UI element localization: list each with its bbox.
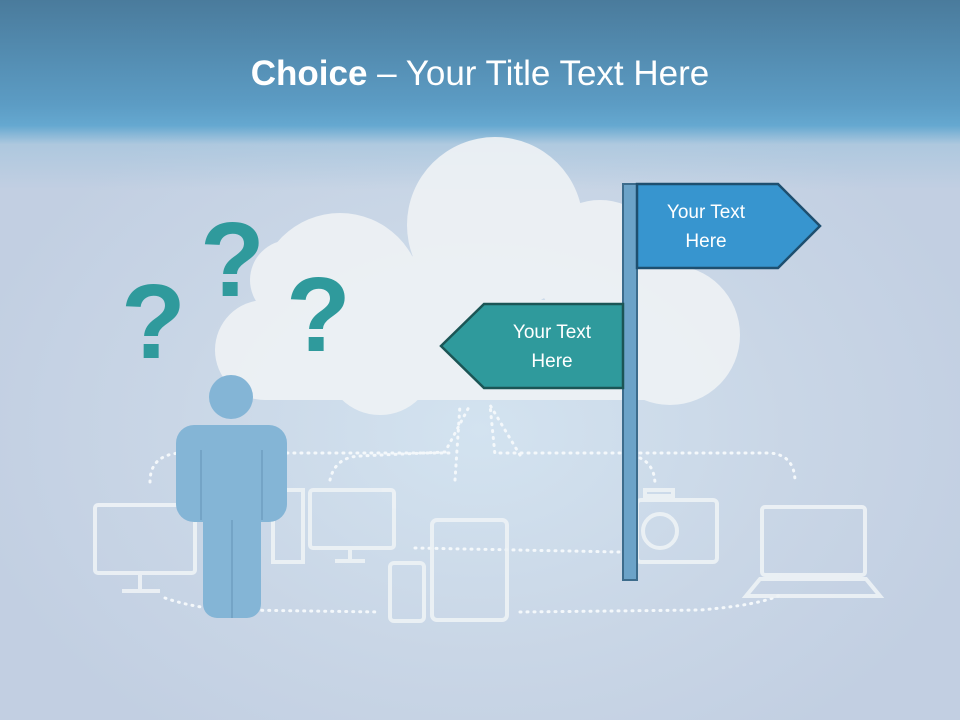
question marks: ? <box>121 263 186 381</box>
sign left: Your Text <box>513 322 592 343</box>
icon: tablet <box>432 520 507 620</box>
sign right: Your Text <box>667 202 746 223</box>
person <box>176 375 287 618</box>
icon: phone <box>390 563 424 621</box>
sign right: Here <box>685 231 727 252</box>
icon: laptop <box>746 507 880 596</box>
cloud <box>215 137 740 415</box>
icon: desktop tower and monitor <box>273 490 394 562</box>
title: Choice – Your Title Text Here <box>251 54 709 93</box>
signpost <box>441 184 820 580</box>
question marks: ? <box>286 256 351 374</box>
sign left <box>441 304 623 388</box>
question marks: ? <box>200 201 265 319</box>
question marks <box>121 201 351 381</box>
network dotted lines <box>150 405 795 612</box>
sign right <box>637 184 820 268</box>
sign left: Here <box>531 351 573 372</box>
icon: camera <box>637 490 717 562</box>
icon: monitor left <box>95 505 195 591</box>
devices <box>95 490 880 621</box>
